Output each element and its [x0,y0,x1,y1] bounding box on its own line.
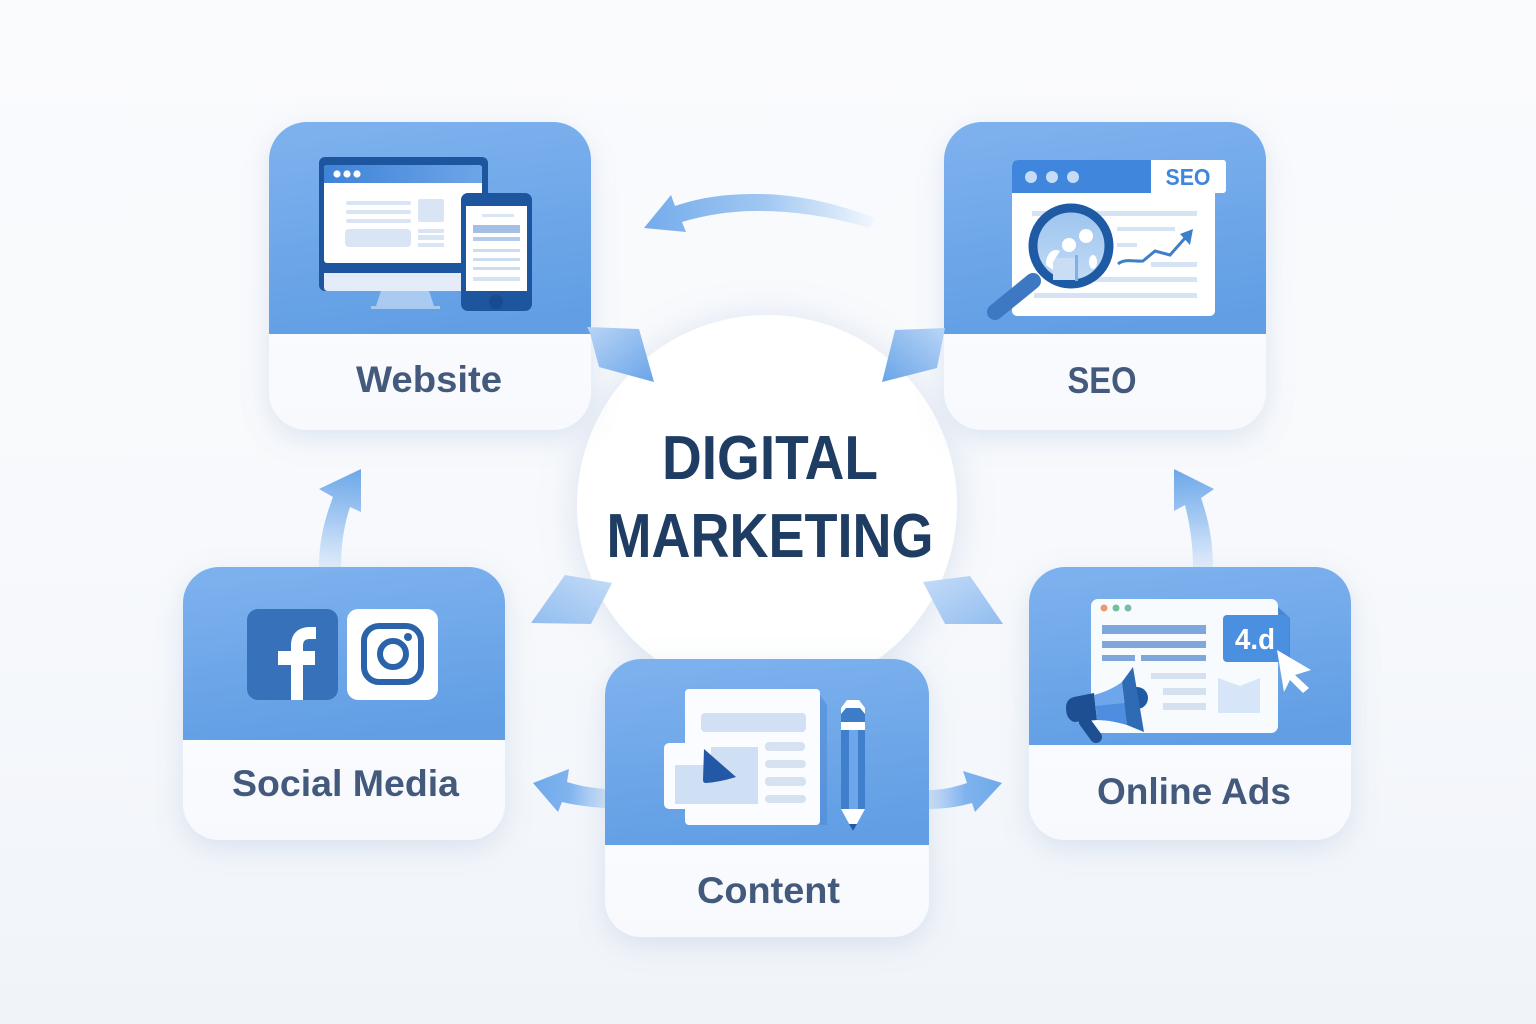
arrow: Content to Online Ads [929,771,1002,812]
icon: pencil [841,700,865,831]
label: SEO [1068,360,1136,401]
icon: desktop monitor and phone [319,157,532,311]
card: Content [605,659,929,937]
icon: facebook [247,609,338,700]
arrow: Content to Social Media [533,769,605,812]
icon: ad window with megaphone and cursor [1066,599,1311,737]
card: SEO [944,122,1266,430]
card: Social Media [183,567,505,840]
header panel [183,567,505,740]
icon: ad window with megaphone and cursor: 4.d [1235,624,1275,656]
label: Content [697,870,840,911]
center circle: digital marketing [577,315,957,695]
header panel [1029,567,1351,745]
header panel [605,659,929,845]
arrow: SEO to Website [644,194,875,232]
arrow: Social Media to Website [319,469,361,567]
icon: document with video [664,689,827,825]
title: DIGITAL [662,424,878,493]
arrow: center to Online Ads [923,576,1003,624]
label: Online Ads [1097,771,1291,812]
arrow: center to Social Media [531,575,612,624]
label: Social Media [232,763,459,804]
arrow: Online Ads to SEO [1174,469,1214,567]
arrow: SEO to center [882,328,945,382]
title: MARKETING [606,502,934,571]
header panel [269,122,591,334]
header panel [944,122,1266,334]
icon: megaphone [1066,667,1148,737]
card: Website [269,122,591,430]
icon: browser with magnifier: SEO [1166,164,1210,190]
title [606,424,934,571]
arrow: Website to center [587,327,654,382]
icon: browser with magnifier [995,160,1226,316]
label: Website [356,359,502,400]
card: Online Ads [1029,567,1351,840]
icon: instagram [347,609,438,700]
